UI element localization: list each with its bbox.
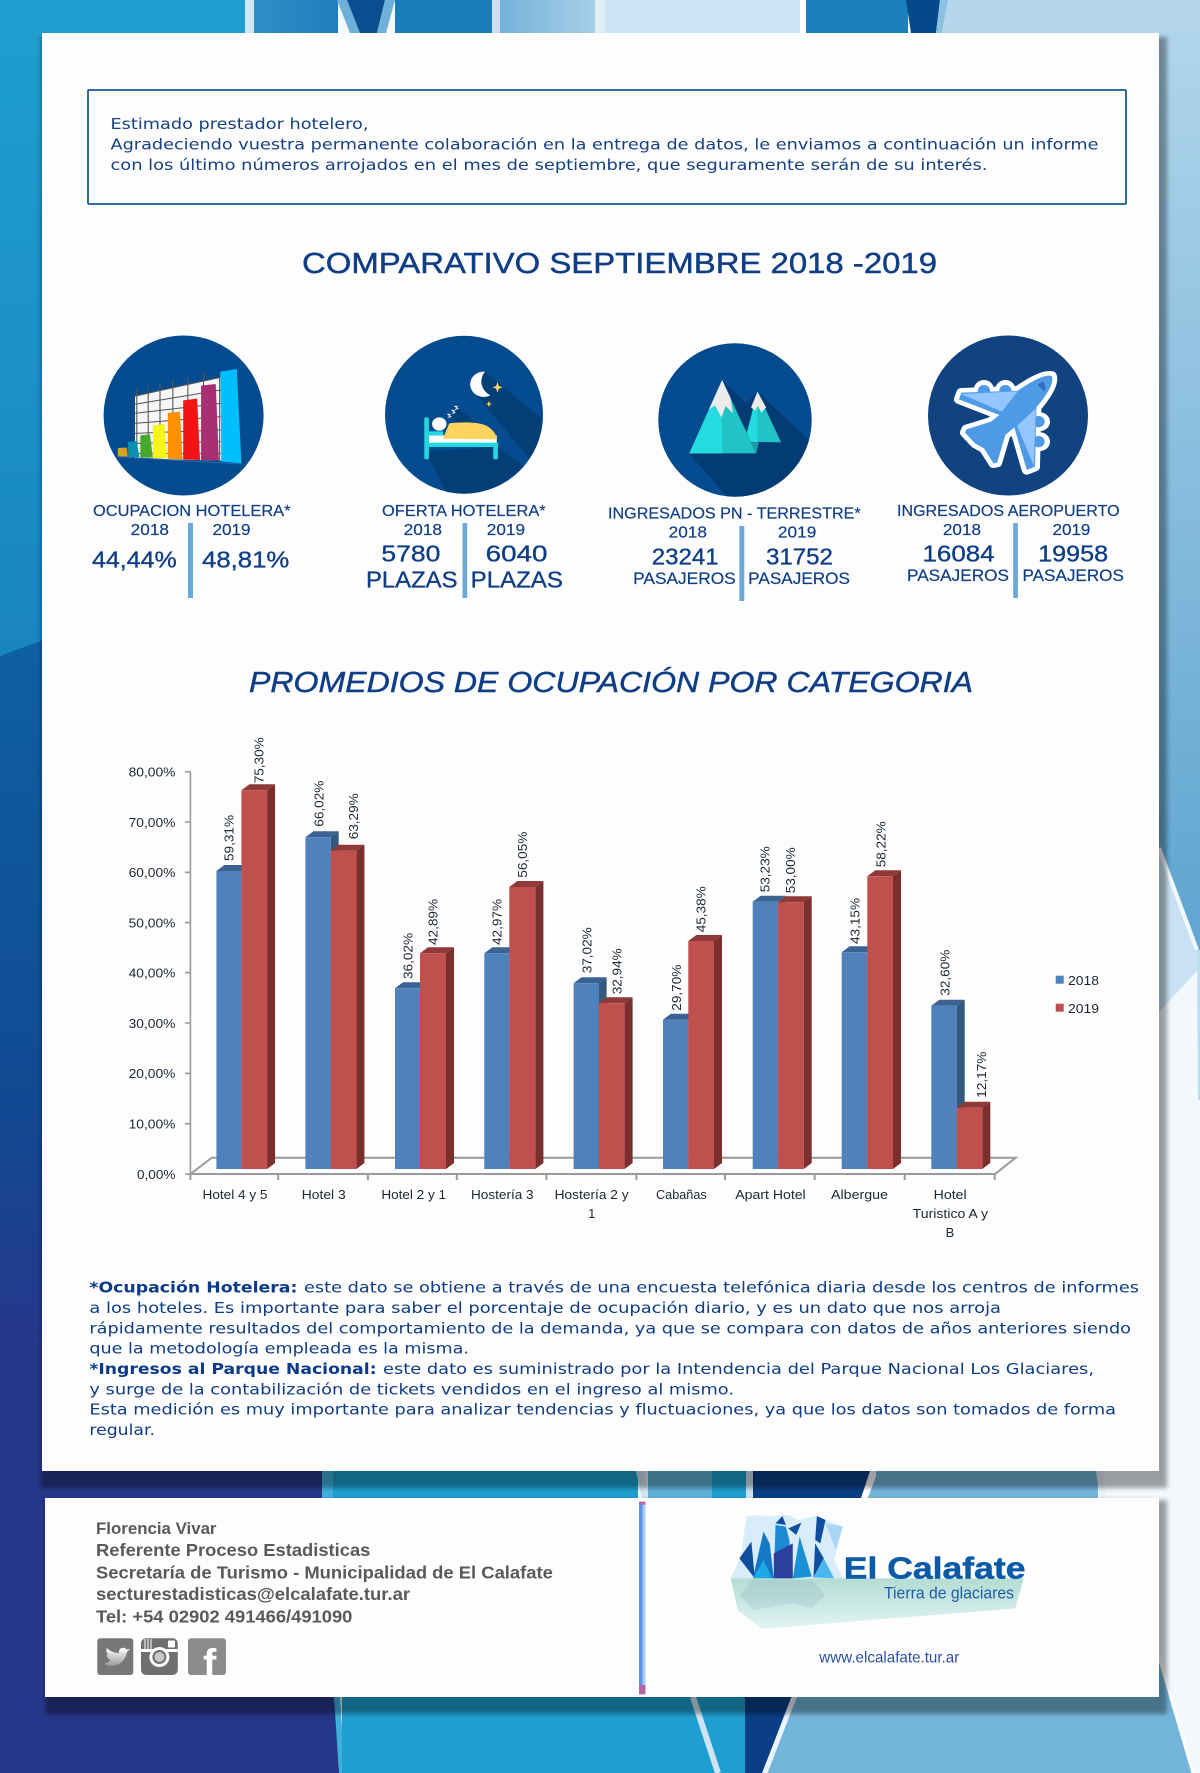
- stat: ingresados aeropuerto: PASAJEROS: [907, 566, 1009, 585]
- stat: ingresados aeropuerto: PASAJEROS: [1022, 566, 1124, 585]
- bars: Hosteria 2 y 1: [574, 977, 633, 1169]
- category labels: Albergue: [831, 1187, 888, 1202]
- contact text: Florencia Vivar: [96, 1520, 217, 1538]
- y axis: 60,00%: [129, 865, 176, 880]
- icon: colorful bar chart: [104, 336, 264, 496]
- logo: El Calafate: [731, 1515, 1026, 1629]
- data labels: 32,60%: [938, 949, 952, 996]
- stat: ocupacion hotelera: [92, 336, 290, 598]
- y axis: [129, 764, 190, 1182]
- legend: 2019: [1068, 1001, 1099, 1016]
- stat: ingresados PN terrestre: PASAJEROS: [748, 569, 850, 588]
- category labels: Cabañas: [656, 1187, 707, 1202]
- y axis: 30,00%: [129, 1016, 176, 1031]
- icon: mountains: [658, 343, 814, 507]
- panel: main content: [42, 33, 1159, 1471]
- stat: oferta hotelera: PLAZAS: [366, 567, 458, 593]
- bar chart: ocupacion por categoria: [129, 737, 1099, 1240]
- bars: Hotel 4 y 5: [216, 784, 275, 1169]
- stat: ingresados PN terrestre: 2019: [778, 524, 816, 542]
- label: INGRESADOS AEROPUERTO: [897, 503, 1120, 520]
- bars: Hotel 3: [305, 831, 364, 1169]
- stat: ocupacion hotelera: 48,81%: [202, 546, 289, 572]
- icon: facebook: f: [203, 1642, 217, 1686]
- category labels: Turistico A y: [913, 1206, 989, 1221]
- logo tagline: Tierra de glaciares: [884, 1584, 1014, 1602]
- stat: ingresados aeropuerto: [897, 336, 1124, 598]
- stat: ingresados PN terrestre: 23241: [652, 543, 719, 569]
- y axis: 10,00%: [129, 1116, 176, 1132]
- contact text: secturestadisticas@elcalafate.tur.ar: [96, 1584, 410, 1604]
- bars: Albergue: [842, 870, 901, 1169]
- intro text: Estimado prestador hotelero,: [110, 115, 368, 133]
- contact text: [96, 1520, 553, 1627]
- icon: facebook: [188, 1638, 226, 1686]
- footnotes: que la metodología empleada es la misma.: [89, 1340, 469, 1358]
- footnotes: *Ocupación Hotelera:: [89, 1278, 297, 1296]
- stat: ingresados PN terrestre: 2018: [669, 524, 707, 542]
- floor: [190, 1158, 1016, 1180]
- icon: sleeping person in bed: [385, 336, 543, 494]
- footnotes: a los hoteles. Es importante para saber el porcentaje de ocupación diario, y es un dato que nos arroja: [89, 1299, 1001, 1317]
- stat: oferta hotelera: 6040: [486, 541, 548, 567]
- label: OCUPACION HOTELERA*: [93, 503, 290, 520]
- data labels: 59,31%: [222, 815, 236, 861]
- y axis: 0,00%: [137, 1167, 176, 1182]
- title: promedios: PROMEDIOS DE OCUPACIÓN POR CATEGORIA: [249, 666, 973, 699]
- logo reflection: [731, 1578, 1024, 1629]
- data labels: 37,02%: [579, 927, 594, 973]
- icon: airplane: [928, 336, 1088, 496]
- icon: twitter: [97, 1638, 133, 1675]
- stat: oferta hotelera: 5780: [381, 541, 440, 567]
- category labels: Hotel 2 y 1: [381, 1187, 446, 1202]
- footnotes: [89, 1278, 1139, 1439]
- title: comparativo: COMPARATIVO SEPTIEMBRE 2018 -2019: [302, 248, 937, 280]
- stat: ingresados PN terrestre: PASAJEROS: [633, 569, 736, 588]
- bars: Cabanas: [663, 935, 722, 1169]
- data labels: 53,00%: [783, 847, 798, 893]
- intro box: [88, 90, 1126, 204]
- icon: instagram: [141, 1638, 178, 1675]
- data labels: 43,15%: [848, 898, 862, 944]
- stat: ocupacion hotelera: 2019: [212, 522, 250, 539]
- stat: oferta hotelera: [366, 336, 563, 598]
- category labels: [202, 1187, 989, 1240]
- stat: ingresados aeropuerto: 16084: [922, 541, 995, 567]
- category labels: 1: [588, 1206, 595, 1221]
- footnotes: este dato es suministrado por la Intendencia del Parque Nacional Los Glaciares,: [383, 1360, 1094, 1378]
- legend: 2018: [1068, 973, 1099, 988]
- stat: ingresados aeropuerto: 2019: [1052, 522, 1090, 539]
- y axis: 80,00%: [129, 764, 176, 780]
- data labels: 42,97%: [489, 899, 504, 945]
- category labels: Hostería 2 y: [555, 1187, 629, 1202]
- footnotes: este dato se obtiene a través de una encuesta telefónica diaria desde los centros de informes: [304, 1278, 1139, 1296]
- divider: [639, 1502, 646, 1694]
- footnotes: rápidamente resultados del comportamiento de la demanda, ya que se compara con datos de años anteriores siendo: [89, 1320, 1131, 1338]
- category labels: Apart Hotel: [735, 1187, 806, 1202]
- website: www.elcalafate.tur.ar: [818, 1650, 960, 1667]
- logo mark: ice: [731, 1515, 1024, 1629]
- y axis: 20,00%: [129, 1066, 176, 1081]
- category labels: Hostería 3: [471, 1187, 534, 1202]
- bars: Apart Hotel: [753, 896, 812, 1169]
- intro text: Agradeciendo vuestra permanente colaboración en la entrega de datos, le enviamos a continuación un informe: [110, 136, 1098, 154]
- data labels: 66,02%: [312, 780, 326, 827]
- stat: ingresados aeropuerto: 19958: [1038, 541, 1108, 567]
- intro text: [110, 115, 1098, 174]
- stat: ingresados aeropuerto: 2018: [943, 522, 981, 539]
- panel: footer: [45, 1498, 1159, 1697]
- stat: ocupacion hotelera: 2018: [131, 522, 169, 539]
- category labels: Hotel 4 y 5: [202, 1187, 268, 1202]
- category labels: Hotel: [934, 1187, 967, 1202]
- logo wordmark: El Calafate: [844, 1550, 1026, 1585]
- bars: Hosteria 3: [484, 881, 543, 1169]
- bars: Hotel Turistico A y B: [931, 1000, 990, 1169]
- stat: ingresados PN terrestre: [608, 343, 861, 601]
- stat: ingresados PN terrestre: 31752: [766, 543, 833, 569]
- data labels: 75,30%: [252, 737, 266, 783]
- data labels: 12,17%: [974, 1051, 989, 1098]
- data labels: 45,38%: [694, 886, 708, 932]
- data labels: 36,02%: [400, 933, 416, 979]
- data labels: [222, 737, 989, 1098]
- footnotes: y surge de la contabilización de tickets vendidos en el ingreso al mismo.: [89, 1380, 734, 1398]
- stat: oferta hotelera: 2018: [404, 522, 442, 539]
- stat: ocupacion hotelera: 44,44%: [92, 546, 177, 572]
- footnotes: Esta medición es muy importante para analizar tendencias y fluctuaciones, ya que los datos son tomados de forma: [89, 1400, 1116, 1418]
- contact text: Referente Proceso Estadisticas: [96, 1540, 371, 1560]
- y axis: 70,00%: [129, 815, 176, 830]
- intro text: con los último números arrojados en el mes de septiembre, que seguramente serán de su interés.: [110, 156, 988, 174]
- footnotes: *Ingresos al Parque Nacional:: [89, 1360, 377, 1378]
- bars: Hotel 2 y 1: [395, 947, 454, 1169]
- data labels: 42,89%: [426, 899, 440, 945]
- stat: oferta hotelera: PLAZAS: [471, 567, 563, 593]
- data labels: 56,05%: [515, 831, 530, 878]
- legend: [1056, 973, 1099, 1016]
- data labels: 58,22%: [874, 821, 888, 867]
- y axis: 50,00%: [129, 915, 176, 930]
- contact text: Secretaría de Turismo - Municipalidad de El Calafate: [96, 1562, 553, 1582]
- data labels: 29,70%: [669, 964, 684, 1011]
- contact text: Tel: +54 02902 491466/491090: [96, 1607, 353, 1627]
- y axis: 40,00%: [129, 965, 176, 980]
- category labels: Hotel 3: [302, 1187, 346, 1202]
- label: INGRESADOS PN - TERRESTRE*: [608, 506, 861, 523]
- stat: oferta hotelera: 2019: [487, 522, 525, 539]
- category labels: B: [946, 1225, 954, 1240]
- footnotes: regular.: [89, 1421, 155, 1439]
- data labels: 32,94%: [610, 948, 624, 994]
- data labels: 53,23%: [758, 846, 772, 892]
- data labels: 63,29%: [346, 793, 361, 839]
- label: OFERTA HOTELERA*: [382, 503, 546, 520]
